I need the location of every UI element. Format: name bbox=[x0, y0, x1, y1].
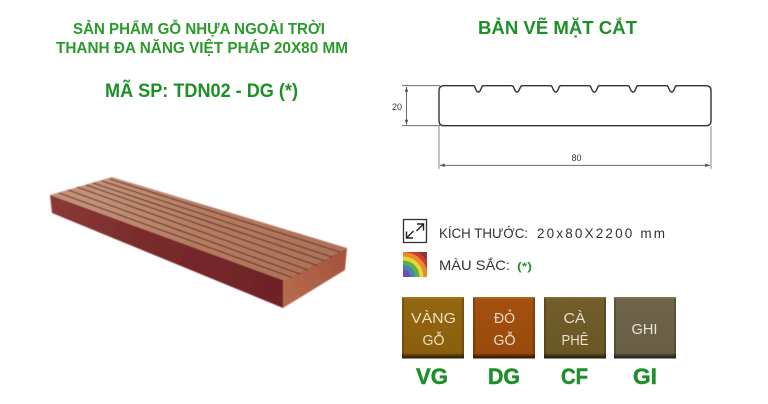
swatch: VG: VG bbox=[416, 364, 448, 389]
plank top face bbox=[50, 177, 347, 280]
colour label: MÀU SẮC: bbox=[439, 256, 510, 273]
heading: cross-section drawing: BẢN VẼ MẶT CẮT bbox=[478, 17, 638, 38]
width dimension bbox=[439, 126, 711, 169]
swatch: DG: GỖ bbox=[494, 331, 516, 349]
title: SẢN PHẨM GỖ NHỰA NGOÀI TRỜI bbox=[73, 19, 325, 38]
product code: MÃ SP: TDN02 - DG (*) bbox=[105, 80, 298, 102]
swatch: DG: ĐỎ bbox=[494, 309, 515, 327]
height dimension bbox=[392, 86, 440, 126]
swatch: DG bbox=[473, 297, 535, 389]
profile outline bbox=[439, 86, 711, 126]
plank end face bbox=[283, 248, 347, 308]
swatch: VG: GỖ bbox=[422, 331, 444, 349]
swatch: GI: GHI bbox=[632, 321, 658, 338]
swatch: CF: CÀ bbox=[564, 310, 586, 327]
plank front face bbox=[50, 195, 283, 308]
width dimension: 80 bbox=[571, 153, 582, 163]
dimensions text: 20x80X2200 mm bbox=[537, 226, 665, 241]
swatch: GI bbox=[614, 297, 676, 389]
title bbox=[56, 19, 348, 57]
swatch: VG bbox=[402, 297, 464, 389]
swatch: CF bbox=[544, 297, 606, 389]
icon: resize arrows bbox=[404, 220, 426, 242]
icon: rainbow bbox=[403, 252, 427, 277]
dimensions text: KÍCH THƯỚC: bbox=[439, 225, 528, 241]
height dimension: 20 bbox=[392, 102, 402, 112]
product image: wooden plank bbox=[50, 177, 347, 308]
swatch: DG: DG bbox=[488, 364, 520, 389]
swatch: GI: GI bbox=[633, 364, 657, 389]
plank grooves bbox=[59, 179, 340, 278]
colour label: (*) bbox=[517, 261, 532, 273]
dimensions text bbox=[439, 225, 665, 241]
swatch: CF: PHÊ bbox=[562, 332, 588, 349]
swatch: VG: VÀNG bbox=[411, 310, 456, 327]
cross-section drawing bbox=[392, 86, 711, 169]
swatch: CF: CF bbox=[561, 364, 588, 389]
title: THANH ĐA NĂNG VIỆT PHÁP 20X80 MM bbox=[56, 38, 348, 57]
colour label bbox=[439, 256, 532, 273]
